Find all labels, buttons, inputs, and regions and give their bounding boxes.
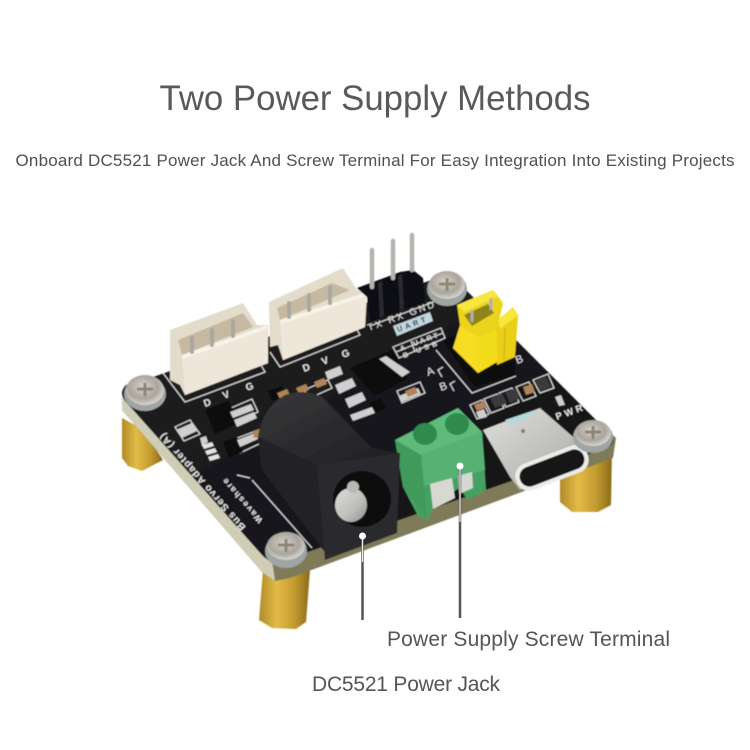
silkscreen labels: G [244,381,256,394]
terminal top face [395,408,482,455]
screw: right [573,420,613,453]
jumper: right [497,307,518,365]
leader line: power jack [359,532,366,620]
jack body top [258,392,400,465]
jack center contact [335,488,367,522]
title: Two Power Supply Methods [160,79,590,118]
silkscreen labels: A [425,365,437,379]
jack opening [333,471,391,527]
yellow jumpers [442,290,518,387]
JST connector 2 [269,268,367,360]
subtitle: Onboard DC5521 Power Jack And Screw Terminal For Easy Integration Into Existing Projects [16,151,734,170]
silkscreen labels: V [320,355,331,368]
silkscreen labels [158,299,584,532]
SMD components [176,350,565,461]
brass standoff: left [122,418,163,471]
mode table text: B [402,352,409,360]
mode table text: A [399,345,406,353]
brass standoff: right [560,448,612,512]
jumper: left [453,290,503,373]
silkscreen labels: PWR [554,403,584,423]
screw: left [124,375,166,411]
label: power jack: DC5521 Power Jack [312,673,500,696]
board top surface [122,276,613,562]
circuit board [122,276,616,581]
jack front [317,453,400,560]
UART tag [393,312,433,336]
green screw terminal [395,408,486,520]
mode table text: USB [415,341,438,355]
screw: top [427,271,467,306]
DC5521 power jack [258,392,400,560]
pins [289,287,330,317]
leader line: screw terminal [456,462,464,618]
mode table text: UART [412,332,440,348]
terminal front face [421,432,485,486]
product photo: servo adapter board [122,235,616,629]
screw: bottom [265,532,307,568]
silkscreen labels: B [514,353,525,367]
silkscreen labels: Bus Servo Adapter (A) [158,431,248,532]
silkscreen labels: Waveshare [220,476,265,525]
jack side [258,437,327,555]
silkscreen labels: TX RX GND [366,299,436,334]
silkscreen outlines [163,301,554,548]
silkscreen labels: V [221,389,232,402]
pin header with housing [357,235,425,322]
mode table text [399,332,440,360]
JST connector 1 [170,303,268,395]
silkscreen labels: D [202,397,213,410]
UART tag: UART [396,315,427,334]
brass standoff: bottom [259,570,310,629]
jumper base [442,330,515,387]
silkscreen labels: D [301,362,312,375]
terminal side face [395,440,427,520]
pins [192,321,233,352]
silkscreen labels: G [340,348,352,361]
USB-C port [483,408,592,495]
silkscreen labels: B [438,380,449,394]
board edge [122,392,616,581]
label: screw terminal: Power Supply Screw Terminal [387,628,670,651]
